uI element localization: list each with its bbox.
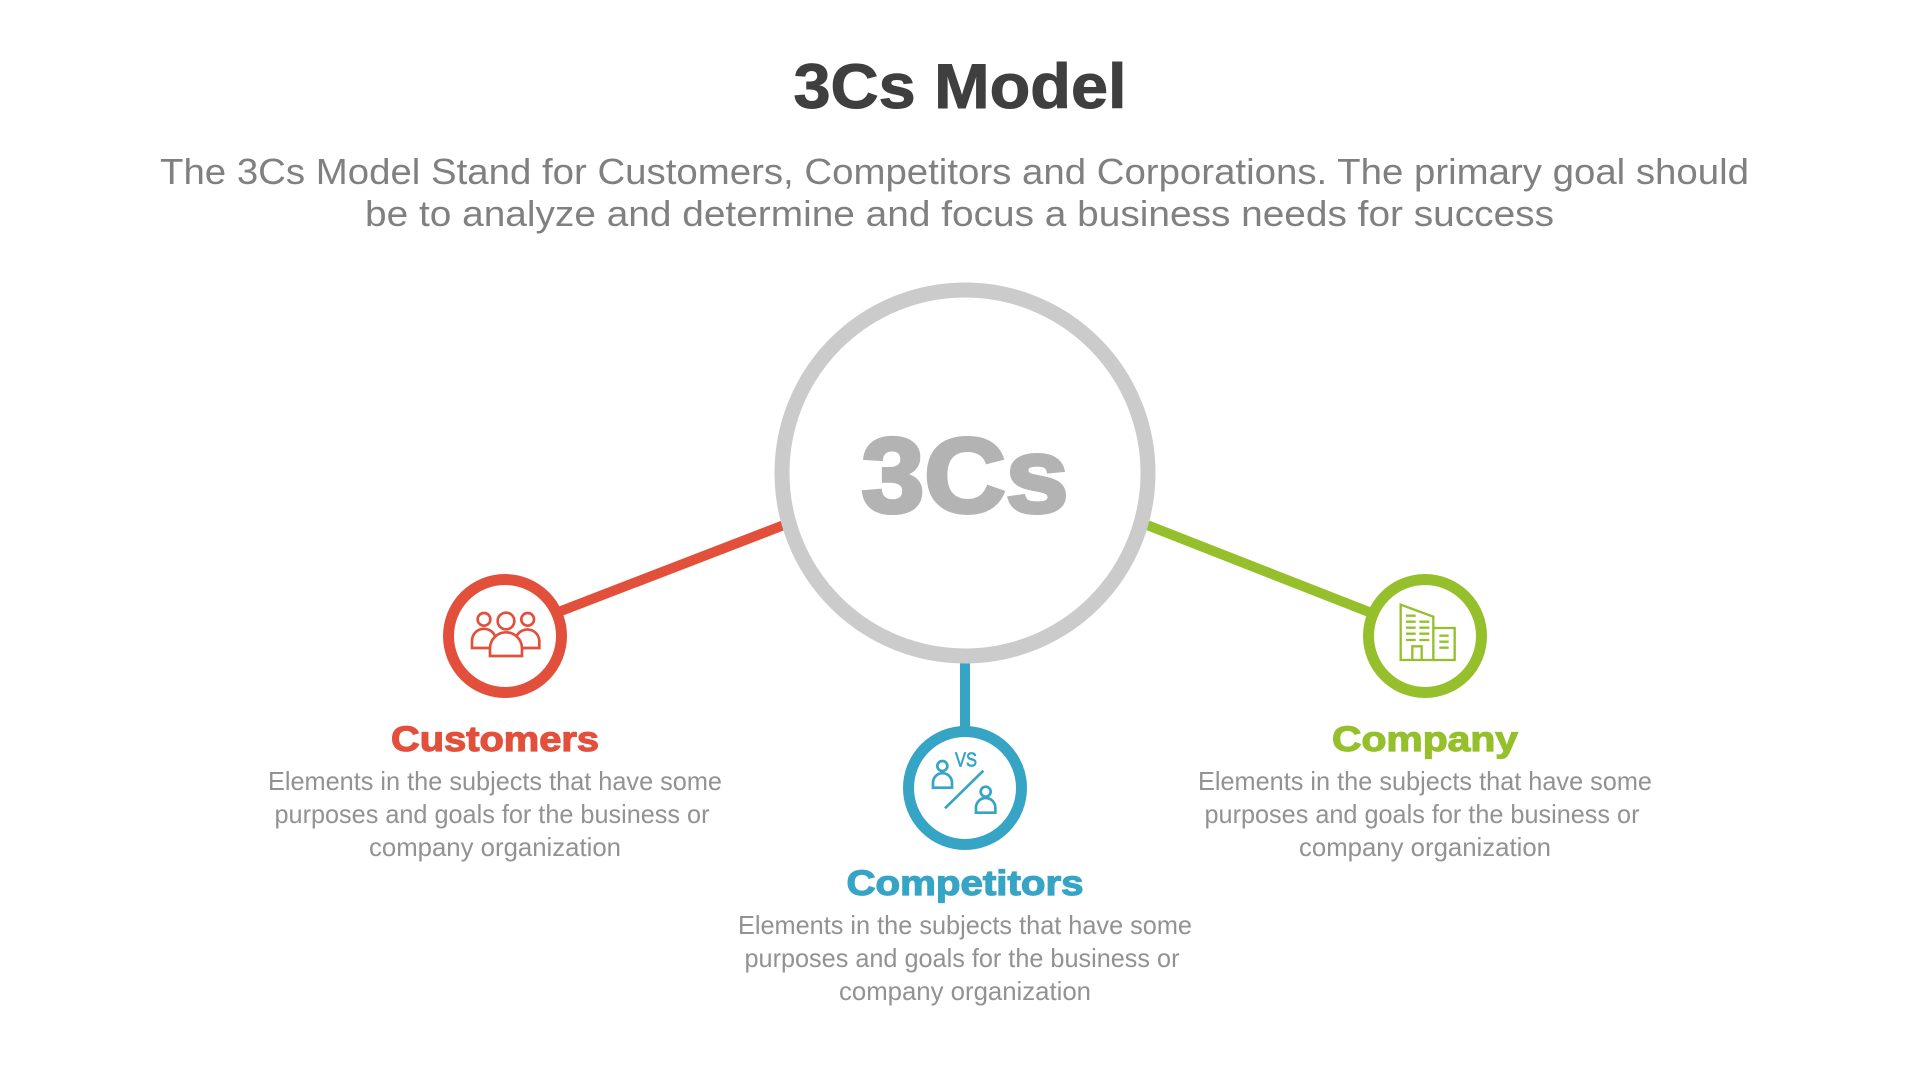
heading: customers: Customers: [391, 720, 599, 759]
text: company description: company organization: [1299, 832, 1551, 862]
central circle: [782, 290, 1148, 656]
text: competitors description: company organization: [839, 976, 1091, 1006]
central label: 3Cs: [862, 417, 1068, 535]
text: company description: purposes and goals for the business or: [1204, 799, 1640, 829]
connector: customers: [561, 525, 784, 611]
connector: competitors: [960, 655, 970, 735]
node: customers: [448, 580, 562, 692]
subtitle: [160, 151, 1749, 234]
heading: company: Company: [1332, 720, 1519, 759]
text: competitors description: purposes and goals for the business or: [744, 943, 1180, 973]
title: 3Cs Model: [794, 52, 1126, 122]
text: customers description: [268, 766, 722, 862]
text: customers description: purposes and goals for the business or: [274, 799, 710, 829]
connector: company: [1147, 525, 1369, 612]
icon: people: [472, 613, 539, 656]
heading: competitors: Competitors: [846, 864, 1084, 903]
text: company description: [1198, 766, 1652, 862]
text: competitors description: Elements in the subjects that have some: [738, 910, 1192, 940]
text: customers description: Elements in the subjects that have some: [268, 766, 722, 796]
subtitle: be to analyze and determine and focus a business needs for success: [365, 193, 1554, 234]
text: customers description: company organization: [369, 832, 621, 862]
icon: buildings: [1401, 605, 1455, 660]
node: company: [1368, 580, 1482, 692]
text: competitors description: [738, 910, 1192, 1006]
icon: versus: VS: [955, 749, 977, 772]
node: competitors: [908, 732, 1022, 844]
subtitle: The 3Cs Model Stand for Customers, Competitors and Corporations. The primary goal should: [160, 151, 1749, 192]
text: company description: Elements in the subjects that have some: [1198, 766, 1652, 796]
